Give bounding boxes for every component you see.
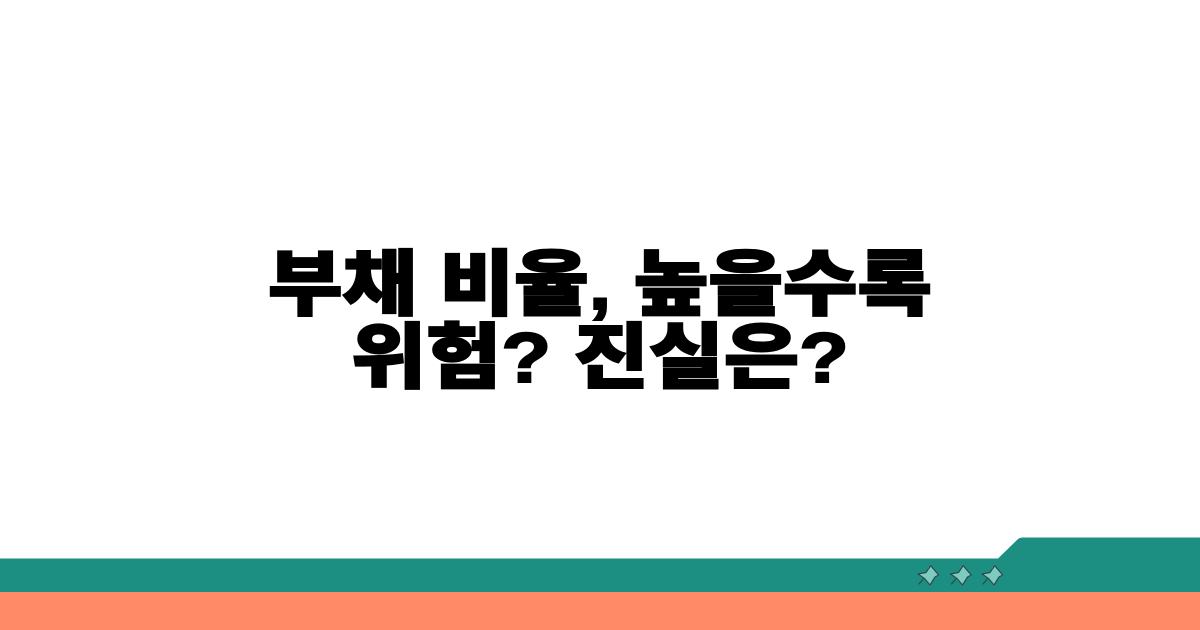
title: 위험? 진실은? xyxy=(351,318,849,396)
title: 부채 비율, 높을수록 xyxy=(268,245,932,324)
icon: pin 2 xyxy=(950,566,971,585)
icon: pin 3 xyxy=(982,566,1003,585)
coral band xyxy=(0,592,1200,630)
icon: pin 1 xyxy=(918,566,939,585)
teal band xyxy=(0,538,1200,592)
